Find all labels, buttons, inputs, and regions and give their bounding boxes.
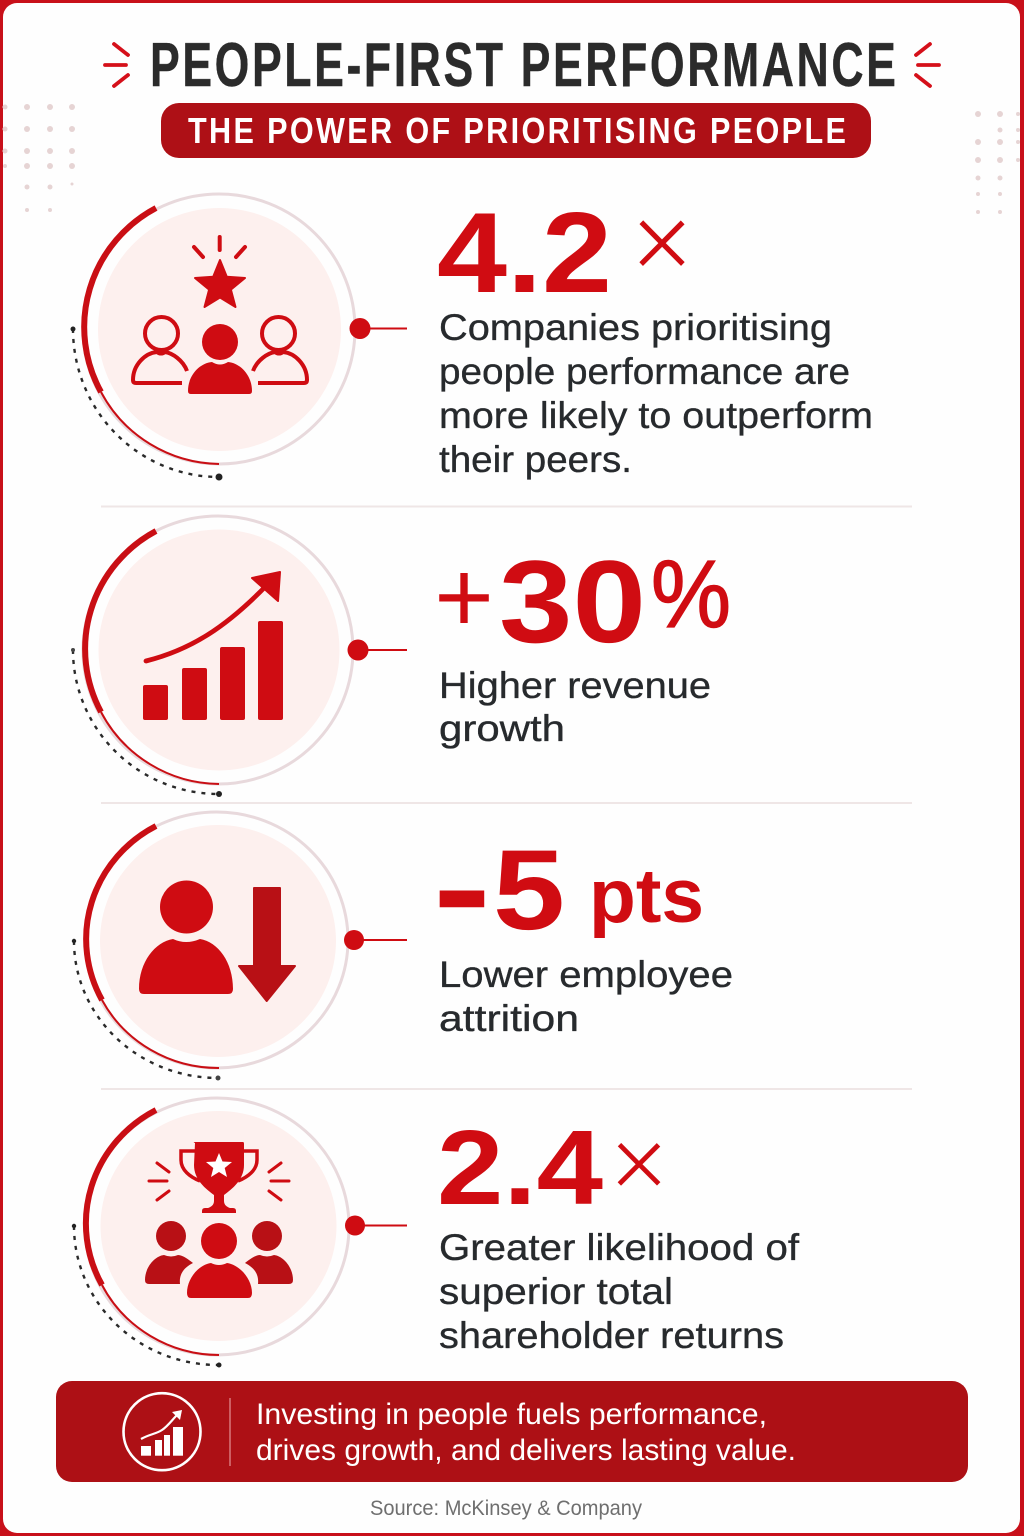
stat 2.4x: × xyxy=(609,1106,669,1222)
row 2: revenue growth xyxy=(71,516,731,797)
stat -5 pts: − xyxy=(438,835,486,960)
stat 4.2x: × xyxy=(630,181,694,304)
row 1: outperform xyxy=(70,181,873,480)
ring graphic 4 xyxy=(72,1098,349,1368)
stat 2.4x xyxy=(437,1106,669,1227)
description 4: Greater likelihood of xyxy=(439,1227,800,1268)
stat 2.4x: 2.4 xyxy=(437,1109,603,1227)
description 1: more likely to outperform xyxy=(439,395,873,436)
ring graphic 2 xyxy=(71,516,353,797)
description 2 xyxy=(439,665,711,749)
ring graphic 1 xyxy=(70,194,355,480)
description 2: growth xyxy=(439,708,565,749)
title sparks right xyxy=(916,44,939,86)
description 3: attrition xyxy=(439,998,579,1039)
connector 1 xyxy=(350,318,407,339)
description 3 xyxy=(439,954,733,1039)
stat -5 pts: 5 xyxy=(493,827,565,954)
connector 4 xyxy=(345,1216,407,1236)
icon: rising bars xyxy=(143,572,283,720)
icon: trophy and team xyxy=(145,1142,293,1298)
description 4: shareholder returns xyxy=(439,1315,784,1356)
icon: person and down arrow xyxy=(139,880,295,1001)
description 1: Companies prioritising xyxy=(439,307,832,348)
banner text xyxy=(256,1398,796,1467)
description 1: their peers. xyxy=(439,439,632,480)
banner text: drives growth, and delivers lasting value. xyxy=(256,1434,796,1467)
icon: people with star xyxy=(133,237,307,394)
takeaway banner xyxy=(56,1381,968,1482)
stat 4.2x: 4.2 xyxy=(437,190,612,317)
description 3: Lower employee xyxy=(439,954,733,995)
subtitle pill xyxy=(161,103,871,158)
description 2: Higher revenue xyxy=(439,665,711,706)
row 3: attrition xyxy=(72,812,733,1080)
title sparks left xyxy=(105,44,128,86)
stat -5 pts: pts xyxy=(589,854,704,939)
banner text: Investing in people fuels performance, xyxy=(256,1398,767,1431)
stat +30%: + xyxy=(434,540,494,654)
decorative dots left xyxy=(2,104,75,212)
connector 3 xyxy=(344,930,407,950)
stat +30% xyxy=(434,536,731,667)
stat +30%: 30 xyxy=(499,536,646,667)
icon: growth chart in circle xyxy=(124,1393,200,1470)
description 1 xyxy=(439,307,873,480)
row 4: shareholder returns xyxy=(72,1098,800,1368)
decorative dots right xyxy=(975,111,1020,214)
title: PEOPLE-FIRST PERFORMANCE xyxy=(150,31,896,100)
description 4: superior total xyxy=(439,1271,673,1312)
source: Source: McKinsey & Company xyxy=(370,1497,642,1520)
description 4 xyxy=(439,1227,800,1356)
stat -5 pts xyxy=(438,827,704,960)
subtitle: THE POWER OF PRIORITISING PEOPLE xyxy=(188,112,846,152)
stat 4.2x xyxy=(437,181,694,317)
ring graphic 3 xyxy=(72,812,348,1080)
stat +30%: % xyxy=(651,541,731,648)
description 1: people performance are xyxy=(439,351,850,392)
connector 2 xyxy=(348,640,407,660)
